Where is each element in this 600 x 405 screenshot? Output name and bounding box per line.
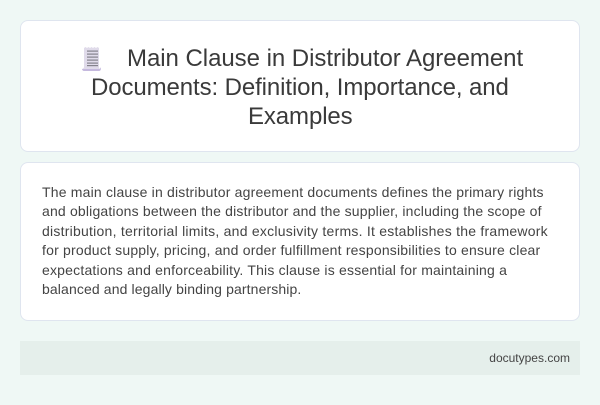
title: Main Clause in Distributor Agreement — [127, 45, 523, 72]
text block: description: balanced and legally binding partnership. — [42, 281, 301, 297]
panel: description card — [20, 162, 580, 321]
title: Documents: Definition, Importance, and — [91, 74, 509, 101]
text block: description: distribution, territorial limits, and exclusivity terms. It establishes the framework — [42, 223, 548, 239]
icon: document — [82, 47, 101, 71]
footer text: source: docutypes.com — [489, 351, 570, 365]
footer bar — [20, 341, 580, 375]
text block: description — [42, 184, 548, 297]
text block: description: The main clause in distributor agreement documents defines the primary rights — [42, 184, 544, 200]
text block: description: and obligations between the distributor and the supplier, including the scope of — [42, 203, 542, 219]
text block: description: for product supply, pricing, and order fulfillment responsibilities to ensure clear — [42, 242, 540, 258]
title — [91, 45, 523, 130]
panel: title card — [20, 20, 580, 152]
title: Examples — [248, 103, 353, 130]
text block: description: expectations and enforceability. This clause is essential for maintaining a — [42, 262, 507, 278]
